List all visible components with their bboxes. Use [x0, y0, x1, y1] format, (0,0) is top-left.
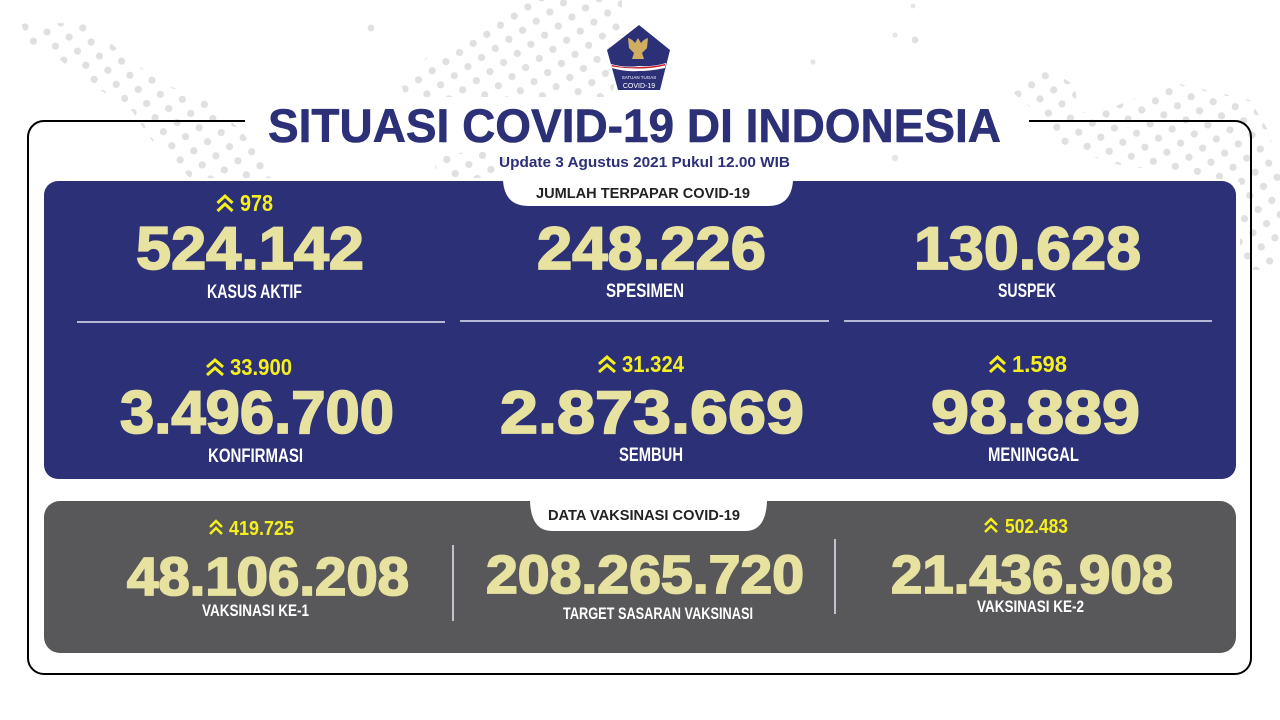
logo: national task force emblem: COVID-19	[623, 83, 655, 90]
stat: vaksinasi ke-2: 21.436.908	[891, 545, 1173, 605]
background dot pattern	[20, 0, 1280, 270]
stat: konfirmasi: 3.496.700	[120, 379, 394, 446]
stat: kasus aktif: KASUS AKTIF	[207, 282, 302, 303]
title: SITUASI COVID-19 DI INDONESIA	[268, 99, 1001, 152]
stat: sembuh	[500, 351, 804, 466]
stat: suspek: 130.628	[914, 215, 1141, 282]
stat: sembuh: 2.873.669	[500, 379, 804, 446]
section tab: JUMLAH TERPAPAR COVID-19	[536, 185, 750, 202]
stat: spesimen: SPESIMEN	[606, 281, 684, 302]
section tab	[530, 501, 767, 531]
stat: meninggal: MENINGGAL	[988, 445, 1079, 466]
stat: vaksinasi ke-2: 502.483	[1005, 516, 1068, 538]
stat: vaksinasi ke-2: VAKSINASI KE-2	[977, 597, 1084, 616]
stat: target sasaran: 208.265.720	[486, 545, 804, 605]
logo: national task force emblem: SATUAN TUGAS	[622, 75, 656, 80]
outer frame	[28, 121, 1251, 674]
stat: target sasaran: TARGET SASARAN VAKSINASI	[563, 604, 753, 623]
stat: meninggal: 1.598	[1012, 351, 1067, 377]
stat: kasus aktif: 978	[240, 190, 273, 216]
stat: sembuh: SEMBUH	[619, 445, 683, 466]
stat: meninggal: 98.889	[931, 379, 1140, 446]
panel: data vaksinasi	[44, 501, 1236, 653]
stat: vaksinasi ke-1: 419.725	[229, 518, 294, 540]
stat: konfirmasi: 33.900	[230, 354, 292, 380]
stat: konfirmasi	[120, 354, 394, 467]
panel: jumlah terpapar	[44, 181, 1236, 479]
logo: national task force emblem	[607, 25, 670, 90]
section tab: DATA VAKSINASI COVID-19	[548, 507, 740, 524]
stat: vaksinasi ke-2	[891, 516, 1173, 616]
stat: sembuh: 31.324	[622, 351, 684, 377]
update date: Update 3 Agustus 2021 Pukul 12.00 WIB	[499, 154, 790, 171]
stat: kasus aktif: 524.142	[136, 215, 364, 282]
stat: vaksinasi ke-1: VAKSINASI KE-1	[202, 601, 309, 620]
section tab	[503, 181, 793, 206]
stat: konfirmasi: KONFIRMASI	[208, 446, 303, 467]
stat: suspek: SUSPEK	[998, 281, 1056, 302]
stat: meninggal	[931, 351, 1140, 466]
stat: vaksinasi ke-1	[127, 518, 409, 620]
stat: vaksinasi ke-1: 48.106.208	[127, 547, 409, 607]
stat: spesimen: 248.226	[537, 215, 766, 282]
stat: kasus aktif	[136, 190, 364, 303]
